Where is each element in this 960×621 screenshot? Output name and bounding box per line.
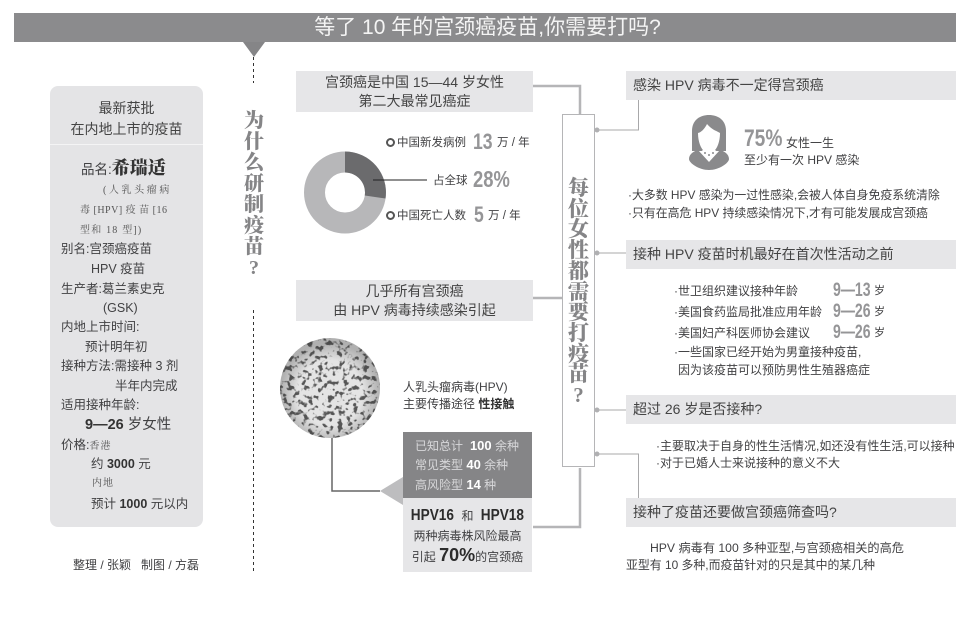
stat: global share [433, 166, 510, 192]
manufacturer line 2: (GSK) [103, 301, 138, 315]
boys note line 2: 因为该疫苗可以预防男性生殖器癌症 [678, 363, 870, 377]
vertical heading: why develop vaccine: 研 [244, 173, 264, 195]
full vaccine name line 3: 型和 18 型]) [80, 225, 142, 236]
connectors to central box [533, 84, 582, 528]
highest risk strains: HPV16 [411, 507, 454, 524]
central vertical heading box: 疫 [568, 342, 589, 366]
section: timing [626, 240, 956, 377]
bullet 2: ·只有在高危 HPV 持续感染情况下,才有可能发展成宫颈癌 [628, 206, 928, 220]
boys note line 1: ·一些国家已经开始为男童接种疫苗, [674, 345, 861, 359]
section heading [626, 240, 956, 269]
bullet 2: ·对于已婚人士来说接种的意义不大 [656, 456, 840, 470]
bullet 1: ·大多数 HPV 感染为一过性感染,会被人体自身免疫系统清除 [628, 188, 940, 202]
note line 2: 主要传播途径 性接触 [403, 397, 514, 411]
stat value: 13 [473, 129, 493, 154]
highest risk strains: HPV18 [481, 507, 524, 524]
section: infection [626, 71, 956, 220]
section heading: 超过 26 岁是否接种? [633, 401, 762, 417]
total types: 已知总计 100 余种 [415, 438, 519, 453]
full vaccine name line 2: 毒 [HPV] 疫 苗 [16 [80, 205, 168, 216]
title [14, 13, 956, 42]
credits: 整理 / 张颖 制图 / 方磊 [73, 558, 199, 572]
bullet 1: ·主要取决于自身的性生活情况,如还没有性生活,可以接种 [656, 439, 955, 453]
ACOG age: 9—26 [833, 322, 871, 343]
transmission note [403, 380, 514, 411]
stat label: 占全球 [433, 175, 468, 187]
panel: incidence heading: 宫颈癌是中国 15—44 岁女性 [325, 74, 504, 90]
icon: woman [689, 115, 729, 170]
risk description: 两种病毒株风险最高 [413, 529, 522, 543]
section heading [626, 395, 956, 424]
FDA age: 9—26 [833, 301, 871, 322]
heading divider [50, 144, 203, 145]
FDA recommendation: ·美国食药监局批准应用年龄 [674, 305, 822, 319]
dashed timeline [253, 57, 254, 571]
body line 1: HPV 病毒有 100 多种亚型,与宫颈癌相关的高危 [650, 541, 904, 555]
panel: incidence heading [296, 71, 533, 112]
central vertical heading box: 打 [568, 321, 589, 345]
section heading: 感染 HPV 病毒不一定得宫颈癌 [633, 77, 824, 93]
panel: HPV cause heading: 由 HPV 病毒持续感染引起 [333, 302, 496, 318]
stat unit: 万 / 年 [497, 137, 530, 149]
stat label line 2: 至少有一次 HPV 感染 [744, 153, 859, 167]
WHO age unit: 岁 [874, 285, 885, 297]
panel: HPV cause heading: 几乎所有宫颈癌 [366, 283, 464, 299]
panel: incidence heading: 第二大最常见癌症 [358, 93, 470, 109]
eligible age label: 适用接种年龄: [61, 398, 139, 412]
vertical heading: why develop vaccine: 为 [244, 110, 264, 132]
stat value: 28% [473, 166, 510, 192]
stat unit: 万 / 年 [488, 210, 521, 222]
mainland label: 内地 [92, 478, 114, 489]
brand name: 品名:希瑞适 [81, 158, 166, 178]
WHO recommendation: ·世卫组织建议接种年龄 [674, 284, 798, 298]
central vertical heading box: 都 [568, 259, 589, 283]
panel: HPV cause heading [296, 280, 533, 321]
Hong Kong price: 约 3000 元 [91, 457, 151, 471]
body line 2: 亚型有 10 多种,而疫苗针对的只是其中的某几种 [626, 558, 875, 572]
central vertical heading box [562, 114, 595, 467]
central vertical heading box: 苗 [568, 362, 589, 386]
panel heading: 在内地上市的疫苗 [70, 121, 182, 137]
cancer share: 引起 70%的宫颈癌 [412, 545, 523, 565]
stat label line 1: 女性一生 [786, 136, 834, 150]
panel heading: 最新获批 [98, 100, 154, 116]
stat: new cases [386, 129, 530, 154]
full vaccine name: (人乳头瘤病 [103, 185, 172, 196]
note line 1: 人乳头瘤病毒(HPV) [403, 380, 508, 394]
ACOG age unit: 岁 [874, 327, 885, 339]
WHO age: 9—13 [833, 280, 871, 301]
central vertical heading box: 位 [568, 197, 589, 221]
vertical heading: why develop vaccine [244, 110, 264, 279]
central vertical heading box: 需 [568, 280, 589, 304]
common types: 常见类型 40 余种 [415, 457, 508, 472]
FDA age unit: 岁 [874, 306, 885, 318]
stat: 75 percent: 75% [744, 125, 782, 152]
central vertical heading box: 要 [568, 300, 589, 324]
section heading [626, 498, 956, 527]
connectors to right sections [595, 100, 639, 498]
central vertical heading box: 性 [568, 238, 589, 262]
price label: 价格:香港 [61, 438, 111, 452]
central vertical heading box: ? [573, 383, 584, 407]
virus connector [331, 438, 380, 492]
eligible age value: 9—26 岁女性 [85, 417, 171, 433]
title: 等了 10 年的宫颈癌疫苗,你需要打吗? [314, 16, 661, 39]
panel: HPV type counts [403, 432, 532, 498]
section heading: 接种了疫苗还要做宫颈癌筛查吗? [633, 504, 837, 520]
vertical heading: why develop vaccine: 制 [244, 194, 264, 216]
vertical heading: why develop vaccine: 疫 [244, 215, 264, 237]
vertical heading: why develop vaccine: 苗 [244, 236, 264, 258]
section: screening [626, 498, 956, 572]
ACOG recommendation: ·美国妇产科医师协会建议 [674, 326, 810, 340]
section: over 26 [626, 395, 956, 470]
section heading [626, 71, 956, 100]
icon: pointer triangle [380, 477, 403, 505]
launch time: 内地上市时间: [61, 320, 139, 334]
alias: 别名:宫颈癌疫苗 [61, 242, 152, 256]
stat label: 中国死亡人数 [397, 210, 466, 222]
section heading: 接种 HPV 疫苗时机最好在首次性活动之前 [633, 246, 894, 262]
donut chart [304, 152, 427, 234]
dosing method: 接种方法:需接种 3 剂 [61, 359, 178, 373]
bullet ring [386, 138, 395, 147]
bullet ring [386, 211, 395, 220]
manufacturer: 生产者:葛兰素史克 [61, 282, 164, 296]
mainland price: 预计 1000 元以内 [91, 497, 188, 511]
stat: deaths [386, 202, 521, 227]
launch time value: 预计明年初 [85, 340, 148, 354]
alias line 2: HPV 疫苗 [91, 262, 145, 276]
stat label: 中国新发病例 [397, 137, 466, 149]
panel: HPV16 and HPV18 [403, 498, 532, 572]
vertical heading: why develop vaccine: 么 [244, 152, 264, 174]
stat value: 5 [474, 202, 484, 227]
highest risk strains [411, 507, 524, 524]
central vertical heading box: 每 [568, 176, 589, 200]
highest risk strains: 和 [461, 509, 474, 523]
icon: title pointer triangle [243, 42, 265, 57]
vertical heading: why develop vaccine: 什 [244, 131, 264, 153]
central vertical heading box: 女 [568, 217, 589, 241]
vertical heading: why develop vaccine: ? [249, 257, 259, 279]
dosing method line 2: 半年内完成 [115, 379, 178, 393]
panel: approved vaccine [50, 86, 203, 527]
high risk types: 高风险型 14 种 [415, 477, 496, 492]
virus image [280, 338, 380, 438]
panel heading [70, 100, 182, 137]
